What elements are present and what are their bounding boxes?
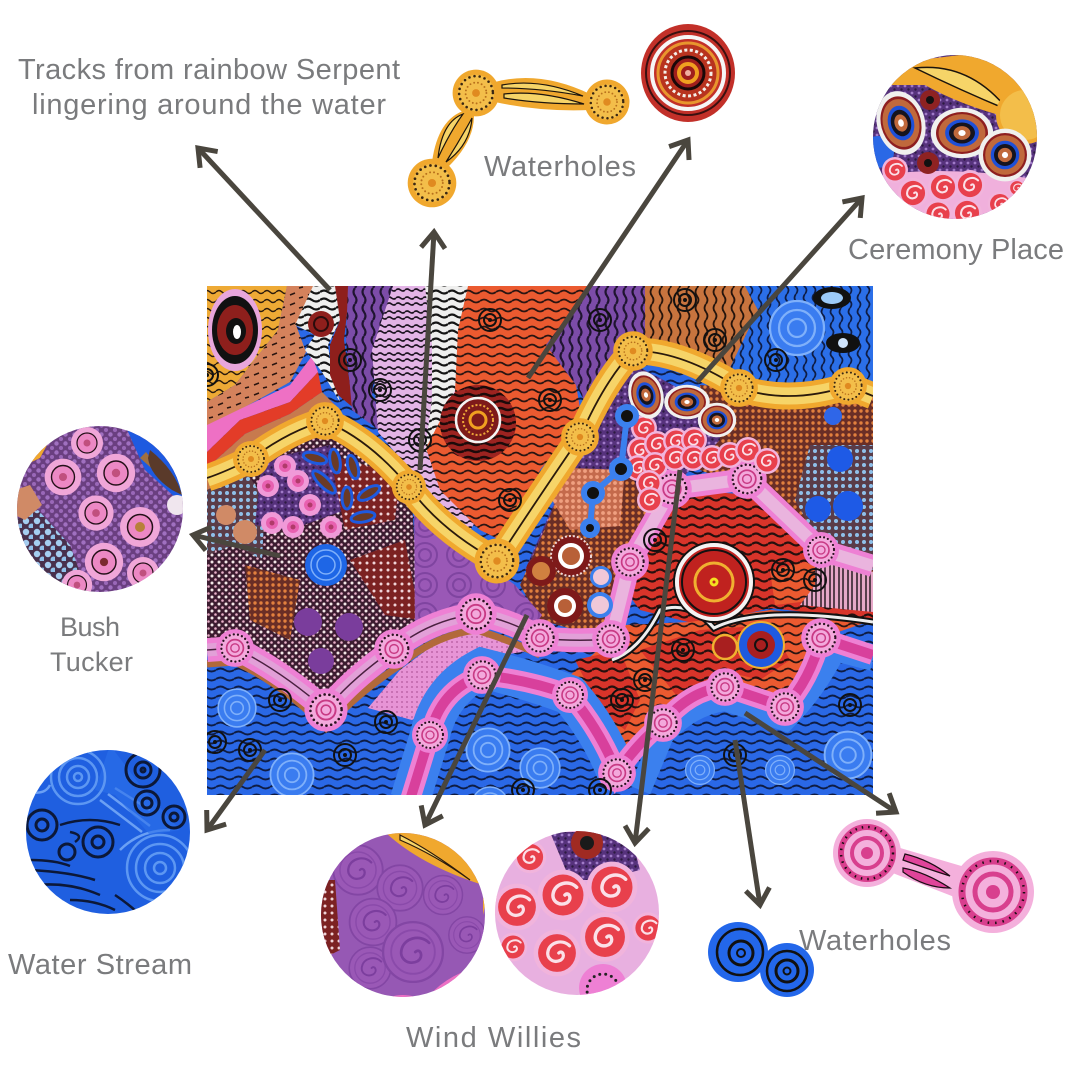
label: bush tucker: Tucker xyxy=(50,647,133,677)
label: tracks from rainbow serpent: Tracks from rainbow Serpent xyxy=(18,54,400,86)
icon: ceremony place circle xyxy=(873,55,1037,219)
label: tracks from rainbow serpent: lingering around the water xyxy=(32,89,386,121)
arrow: pink waterholes xyxy=(745,713,896,812)
label: ceremony place: Ceremony Place xyxy=(848,234,1064,266)
label: wind willies: Wind Willies xyxy=(406,1022,581,1054)
arrow: orange waterholes xyxy=(420,232,434,470)
blue connected rings xyxy=(583,407,636,535)
icon: blue waterhole pair xyxy=(708,922,814,997)
label: bush tucker: Bush xyxy=(60,612,120,642)
icon: wind willies purple circle xyxy=(321,833,485,997)
label: waterholes top: Waterholes xyxy=(484,151,636,183)
arrow: wind willies purple xyxy=(425,615,527,825)
bullseye: blue and yellow xyxy=(713,621,785,669)
bullseye: serpent red xyxy=(456,398,500,442)
label: water stream: Water Stream xyxy=(8,949,192,981)
arrow: blue waterholes xyxy=(735,740,760,905)
icon: bush tucker circle xyxy=(17,426,183,592)
ceremony rings lower-centre xyxy=(526,536,613,624)
pink nodes xyxy=(216,459,841,792)
ceremony ovals xyxy=(623,367,736,437)
panel: central painting xyxy=(196,286,873,823)
icon: pink waterhole trail xyxy=(833,819,1034,933)
bullseye: top-left xyxy=(208,289,262,371)
black ring details xyxy=(196,289,861,801)
blue oval bush tucker seeds xyxy=(302,448,382,524)
blue circle xyxy=(305,544,347,586)
arrow: ceremony place xyxy=(697,198,862,382)
blue water rings xyxy=(218,301,871,823)
label: waterholes bottom: Waterholes xyxy=(799,925,951,957)
yellow nodes xyxy=(233,331,867,584)
arrow: water stream xyxy=(207,750,265,830)
pink rings bush tucker xyxy=(257,455,342,538)
bullseye: top node xyxy=(308,311,334,337)
arrow: red waterhole xyxy=(528,140,688,378)
arrow: bush tucker xyxy=(193,535,280,556)
icon: wind willies red spiral circle xyxy=(495,831,659,995)
icon: orange waterhole trail xyxy=(408,70,630,207)
blue ovals top right xyxy=(813,287,860,353)
red spirals xyxy=(625,415,780,513)
arrow: rainbow serpent tracks xyxy=(198,148,330,290)
icon: red waterhole xyxy=(641,24,735,122)
icon: water stream circle xyxy=(25,745,195,920)
bullseye: large centre xyxy=(674,542,754,622)
arrow: wind willies red xyxy=(635,470,680,843)
